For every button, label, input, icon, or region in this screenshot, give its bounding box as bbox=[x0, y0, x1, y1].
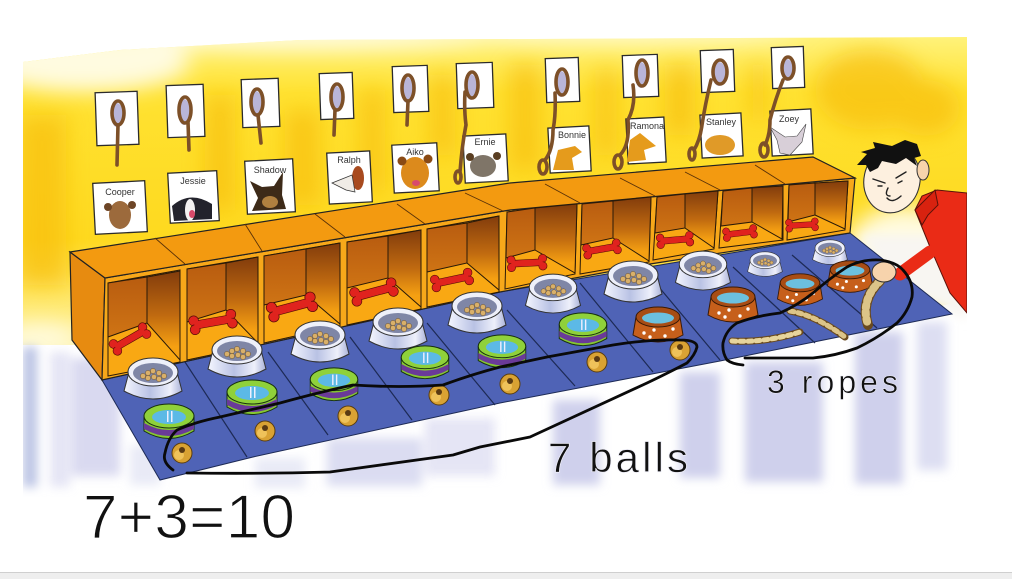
Zoey: Zoey bbox=[779, 114, 800, 124]
Cooper: Cooper bbox=[105, 187, 135, 197]
arm and cuff bbox=[900, 252, 930, 274]
hand bbox=[872, 262, 896, 282]
label: 7 balls: 7 balls bbox=[548, 434, 688, 481]
hair bbox=[857, 140, 921, 172]
leash tile 9 bbox=[689, 49, 735, 160]
red dog bones bbox=[107, 218, 819, 357]
boy in red shirt bbox=[857, 140, 967, 313]
equation: 7+3=10 bbox=[83, 483, 295, 552]
leash tile 7 bbox=[539, 57, 580, 174]
illustration bbox=[0, 22, 967, 497]
Stanley: Stanley bbox=[706, 117, 737, 127]
shelf top surface bbox=[70, 157, 855, 278]
three rope toys bbox=[732, 281, 880, 341]
Shadow: Shadow bbox=[254, 165, 287, 175]
bottom grey bar bbox=[0, 572, 1012, 579]
cubby 8 bbox=[653, 191, 718, 260]
Bonnie: Bonnie bbox=[558, 130, 586, 140]
Jessie bbox=[168, 171, 219, 223]
cubby 4 bbox=[347, 230, 421, 325]
cubby 5 bbox=[427, 216, 499, 307]
cubby 3 bbox=[264, 243, 340, 343]
Ralph: Ralph bbox=[337, 155, 361, 165]
leash tile 5 bbox=[392, 65, 429, 125]
leash tile 1 bbox=[95, 91, 139, 165]
yellow wall background bbox=[0, 22, 967, 352]
Shadow bbox=[245, 159, 295, 214]
tablecloth with lavender stripes bbox=[23, 235, 967, 497]
cubby 1 bbox=[108, 270, 180, 376]
seven balls bbox=[172, 340, 690, 463]
cubby 10 bbox=[787, 181, 848, 240]
blue mat bbox=[102, 233, 952, 480]
soft pale areas of the wash bbox=[23, 38, 928, 345]
ink loop: 7 balls bbox=[164, 340, 697, 473]
Zoey bbox=[770, 109, 813, 156]
face details bbox=[873, 172, 906, 201]
leash tile 8 bbox=[614, 54, 659, 169]
cubby 7 bbox=[580, 197, 651, 274]
leash tile 2 bbox=[166, 84, 205, 150]
Jessie: Jessie bbox=[180, 176, 206, 186]
Ernie: Ernie bbox=[474, 137, 496, 147]
head bbox=[863, 158, 921, 214]
Stanley bbox=[700, 113, 743, 158]
ink loop: 3 ropes bbox=[723, 260, 912, 365]
Aiko: Aiko bbox=[406, 147, 424, 157]
cubby 9 bbox=[719, 186, 783, 248]
Bonnie bbox=[548, 126, 591, 173]
silver food bowls bbox=[124, 240, 847, 399]
shelf front frame bbox=[102, 178, 855, 380]
water bowls bbox=[144, 261, 872, 438]
leash tile 4 bbox=[319, 72, 354, 135]
name cards with dogs bbox=[93, 109, 813, 234]
Ramona bbox=[626, 117, 666, 164]
collar bbox=[915, 190, 938, 225]
Ralph bbox=[327, 151, 372, 204]
Aiko bbox=[392, 143, 439, 193]
label: 3 ropes: 3 ropes bbox=[767, 364, 898, 400]
red shirt bbox=[915, 190, 967, 313]
Ramona: Ramona bbox=[630, 121, 664, 131]
Cooper bbox=[93, 181, 147, 234]
ear bbox=[917, 160, 929, 180]
leash tile 3 bbox=[241, 78, 280, 143]
cubby 6 bbox=[505, 204, 577, 289]
cubby shelf bbox=[70, 157, 855, 380]
leash tile 10 bbox=[760, 46, 805, 157]
cubby 2 bbox=[187, 257, 258, 360]
leash tile 6 bbox=[455, 62, 494, 183]
shelf left side face bbox=[70, 252, 105, 380]
Ernie bbox=[463, 134, 508, 183]
leash tiles bbox=[95, 46, 805, 183]
